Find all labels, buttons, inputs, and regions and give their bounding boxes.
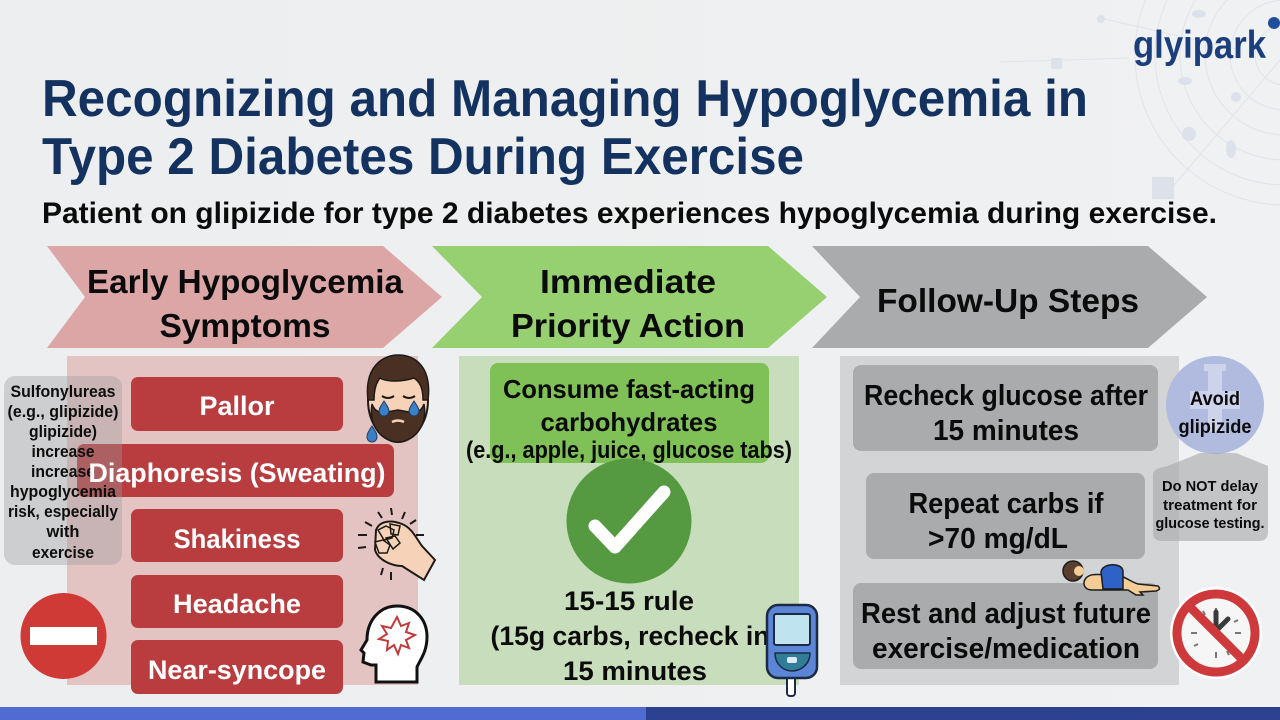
chevron: early hypoglycemia symptoms: Symptoms	[160, 307, 330, 344]
callout: sulfonylureas risk: increase	[31, 463, 95, 481]
text: 15-15 rule: (15g carbs, recheck in	[490, 621, 770, 651]
step: repeat carbs	[866, 473, 1145, 559]
icon: no clock	[1170, 587, 1262, 679]
panel: immediate action	[459, 356, 799, 686]
icon: check mark	[566, 458, 692, 584]
callout: sulfonylureas risk: exercise	[32, 544, 94, 562]
icon: glucose meter	[767, 605, 817, 696]
step: recheck glucose: Recheck glucose after	[864, 380, 1148, 412]
action box: consume carbohydrates: Consume fast-acting	[503, 374, 755, 404]
icon: shaking fist	[358, 508, 435, 580]
callout: sulfonylureas risk: glipizide)	[29, 423, 97, 441]
action box: consume carbohydrates: carbohydrates	[540, 407, 718, 437]
icon: sweating face	[367, 355, 429, 442]
panel: symptoms	[67, 356, 418, 694]
chevron: immediate priority action: Immediate	[540, 263, 716, 300]
subtitle: Patient on glipizide for type 2 diabetes experiences hypoglycemia during exercise.	[42, 197, 1217, 230]
icon: avoid glipizide: Avoid	[1190, 389, 1240, 410]
callout: do not delay: glucose testing.	[1156, 515, 1264, 532]
step: repeat carbs: Repeat carbs if	[908, 488, 1104, 520]
icon: person resting	[1063, 561, 1159, 595]
step: recheck glucose: 15 minutes	[933, 415, 1079, 447]
symptom: shakiness	[131, 509, 343, 562]
symptom bar: diaphoresis	[77, 444, 394, 497]
callout: do not delay: treatment for	[1163, 497, 1257, 514]
symptom: headache	[131, 575, 343, 628]
text: diaphoresis (sweating): Diaphoresis (Sweating)	[88, 458, 386, 488]
text: 15-15 rule	[490, 586, 770, 686]
callout: do not delay	[1153, 453, 1268, 541]
chevron: early hypoglycemia symptoms	[47, 246, 442, 348]
icon: head with pain burst	[361, 606, 427, 682]
action box: consume carbohydrates	[466, 363, 792, 464]
symptom: shakiness: Shakiness	[174, 524, 300, 554]
symptom: pallor: Pallor	[200, 391, 275, 421]
step: recheck glucose	[853, 365, 1158, 451]
title: Recognizing and Managing Hypoglycemia in	[42, 70, 1088, 128]
text: 15-15 rule: 15-15 rule	[564, 586, 694, 616]
callout: sulfonylureas risk: with	[46, 523, 80, 541]
step: rest and adjust: Rest and adjust future	[861, 598, 1151, 630]
callout: sulfonylureas risk: hypoglycemia	[10, 483, 117, 501]
step: rest and adjust: exercise/medication	[872, 633, 1140, 665]
callout: sulfonylureas risk: increase	[32, 443, 94, 461]
footer bar	[0, 707, 1280, 720]
chevron: immediate priority action	[432, 246, 827, 348]
title	[42, 70, 1088, 186]
logo: glyipark: glyipark	[1133, 24, 1266, 67]
symptom: headache: Headache	[173, 589, 301, 619]
callout: sulfonylureas risk: Sulfonylureas	[10, 383, 116, 401]
callout: sulfonylureas risk: risk, especially	[8, 503, 119, 521]
chevron: follow-up steps	[812, 246, 1207, 348]
step: repeat carbs: >70 mg/dL	[928, 523, 1068, 555]
chevron: immediate priority action: Priority Action	[511, 307, 745, 344]
symptom: pallor	[131, 377, 343, 431]
icon: avoid glipizide: glipizide	[1178, 417, 1252, 438]
callout: sulfonylureas risk: (e.g., glipizide)	[8, 403, 118, 421]
step: rest and adjust	[853, 583, 1158, 669]
text: 15-15 rule: 15 minutes	[563, 656, 707, 686]
action box: consume carbohydrates: (e.g., apple, juice, glucose tabs)	[466, 437, 792, 464]
icon: avoid glipizide	[1166, 356, 1264, 454]
title: Type 2 Diabetes During Exercise	[42, 128, 804, 186]
icon: no-entry stop sign	[20, 593, 106, 679]
symptom: near-syncope: Near-syncope	[148, 655, 326, 685]
callout: do not delay: Do NOT delay	[1162, 478, 1259, 495]
symptom: near-syncope	[131, 640, 343, 694]
callout: sulfonylureas risk	[4, 376, 122, 565]
chevron: follow-up steps: Follow-Up Steps	[877, 282, 1139, 319]
panel: follow-up steps	[840, 356, 1179, 685]
chevron: early hypoglycemia symptoms: Early Hypoglycemia	[87, 263, 404, 300]
